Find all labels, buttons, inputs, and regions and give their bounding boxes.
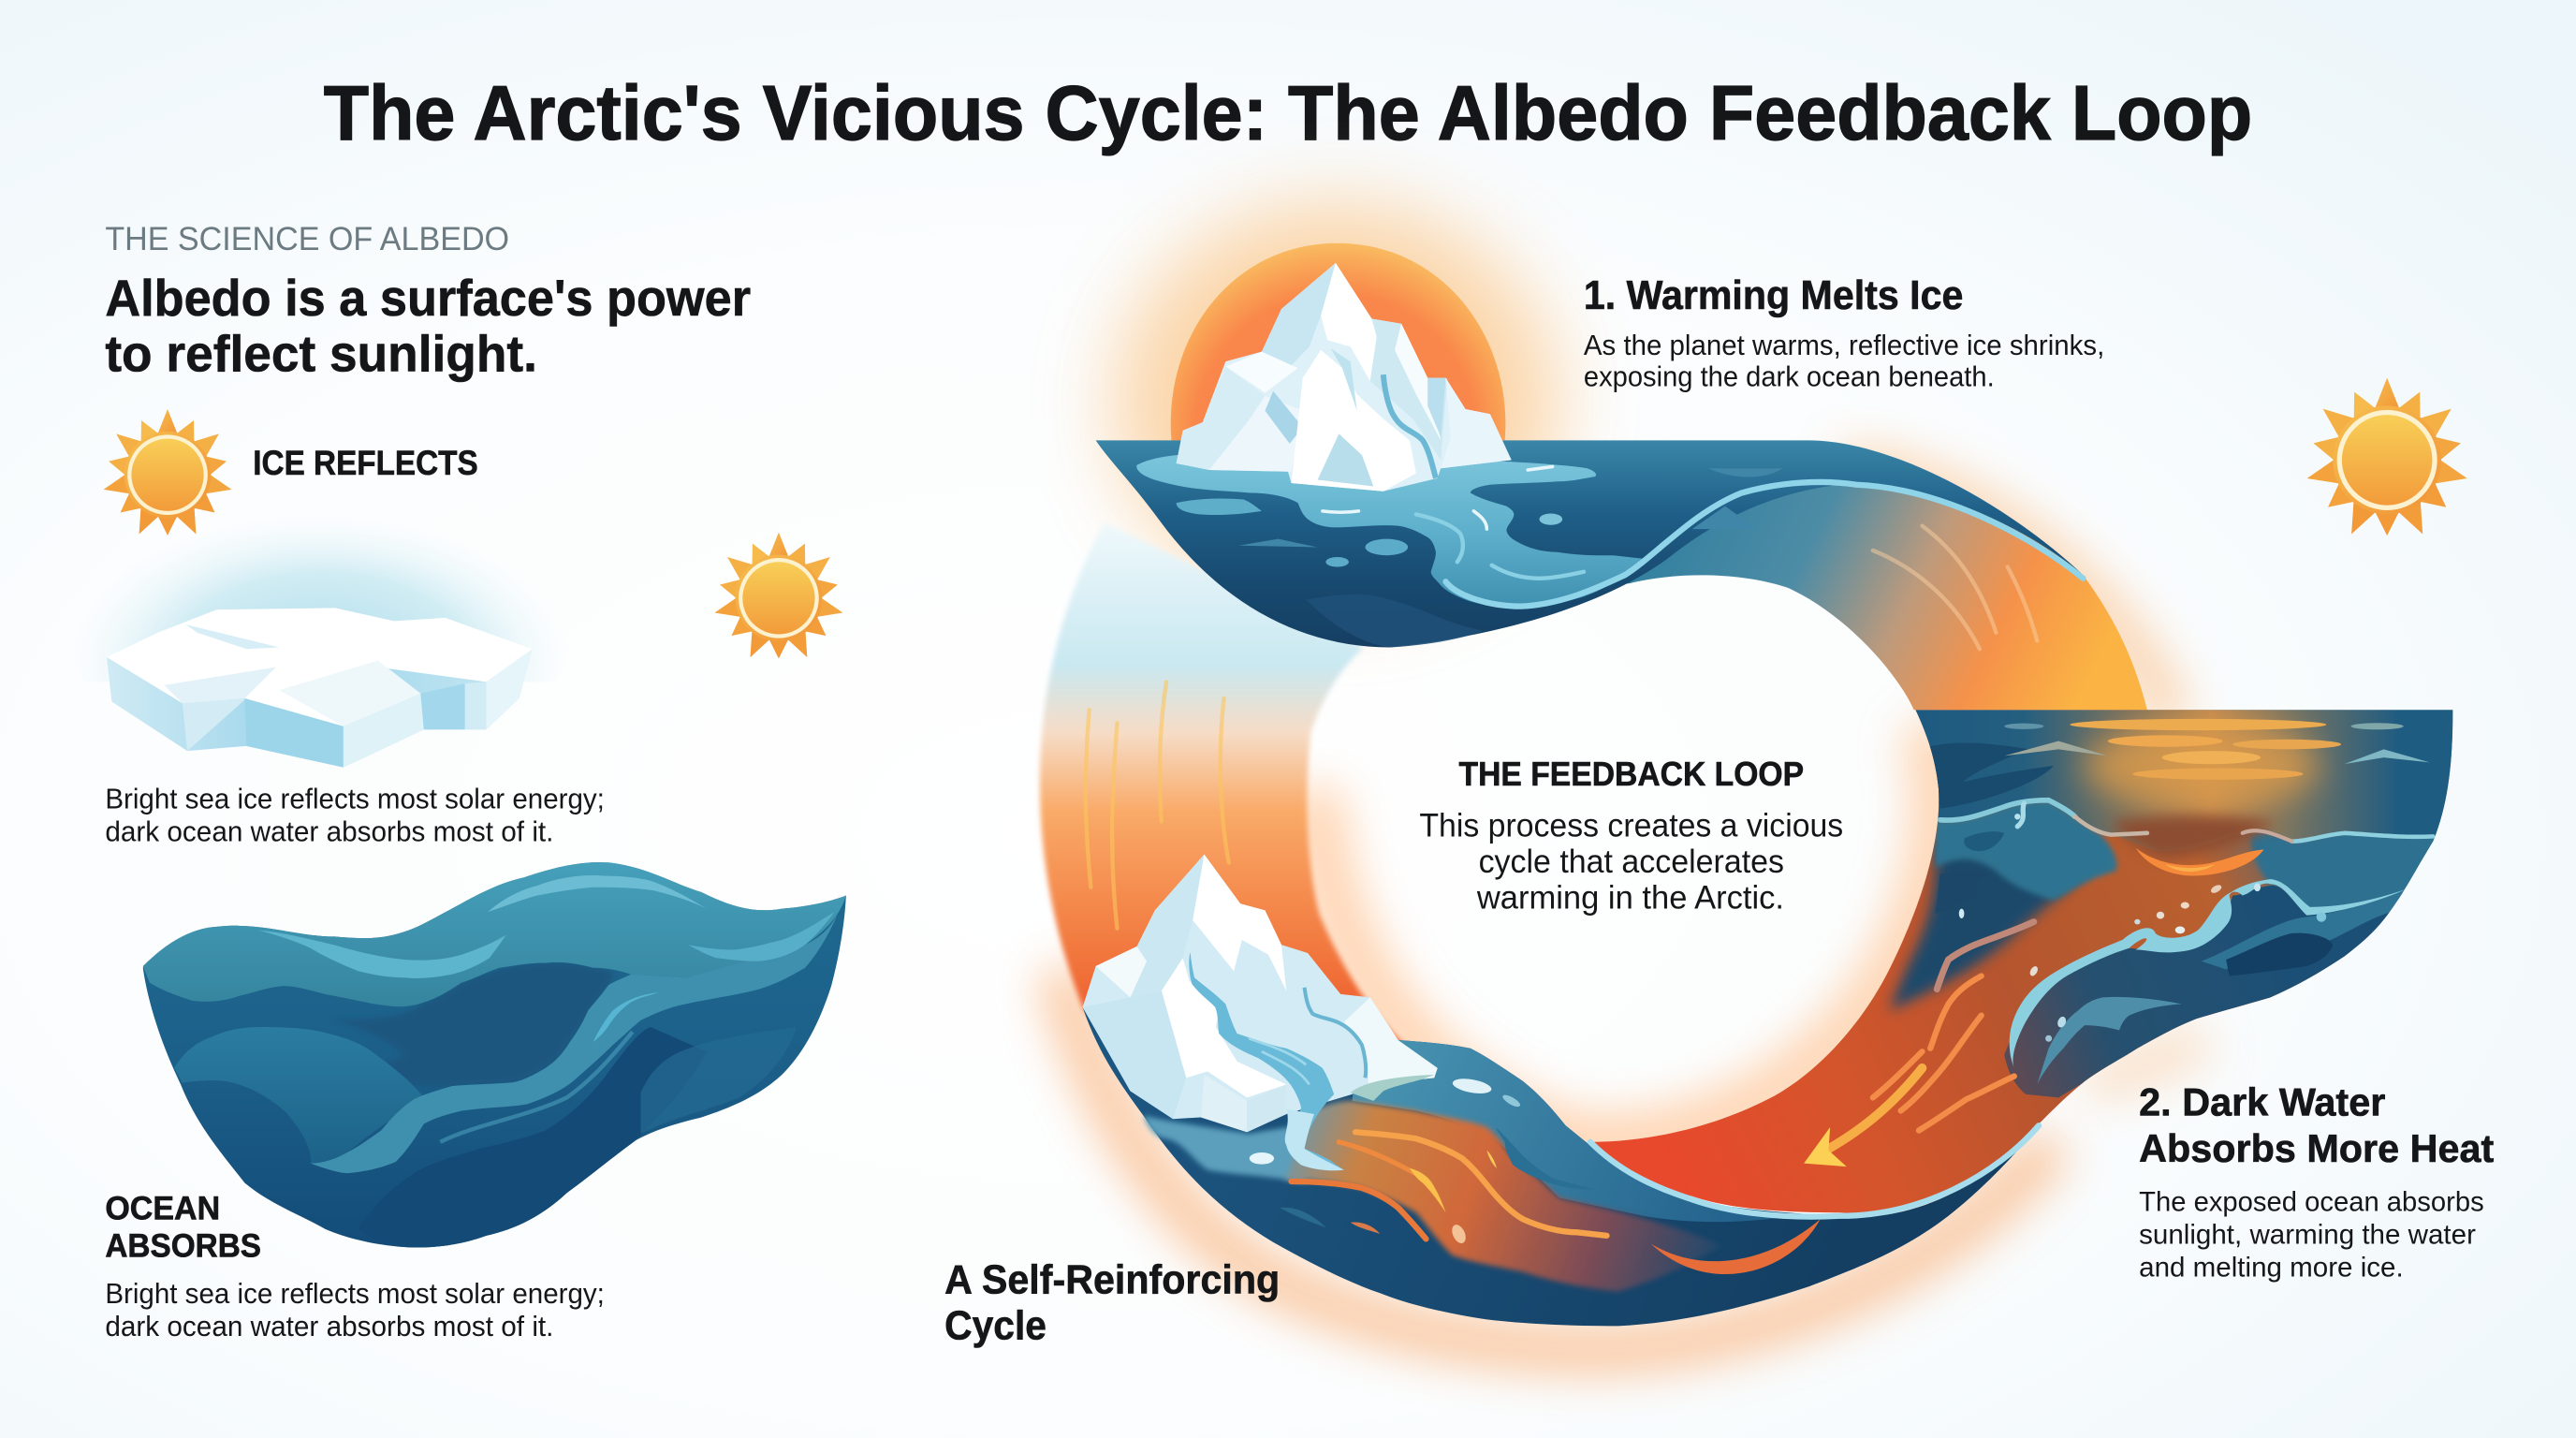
icon: right sun bbox=[2304, 378, 2470, 540]
ocean description bbox=[105, 1277, 605, 1343]
feedback loop centre text: warming in the Arctic. bbox=[1476, 880, 1784, 917]
icon: orange sun halo behind iceberg bbox=[1171, 243, 1505, 440]
step 2 text: Absorbs More Heat bbox=[2139, 1126, 2494, 1170]
section heading: to reflect sunlight. bbox=[105, 326, 537, 383]
icon: sun beside ice reflects bbox=[101, 409, 234, 538]
step 1 text: 1. Warming Melts Ice bbox=[1584, 272, 1963, 318]
icon: second sun bbox=[712, 533, 845, 662]
illustration: ocean wave bbox=[143, 862, 846, 1248]
ocean description: Bright sea ice reflects most solar energy; bbox=[105, 1277, 605, 1310]
dark left wedge bbox=[1889, 838, 2083, 1010]
panel: feedback loop ring bbox=[1040, 202, 2452, 1349]
ocean absorbs label bbox=[105, 1190, 261, 1265]
sky band with golden reflection bbox=[1906, 710, 2452, 851]
crests bbox=[1940, 800, 2075, 820]
self-reinforcing cycle caption bbox=[944, 1256, 1280, 1348]
segment 1: melting ice water bbox=[1096, 440, 2083, 648]
step 2 text: sunlight, warming the water bbox=[2139, 1220, 2476, 1251]
arrow: heat flow bbox=[1804, 1068, 1922, 1167]
segment 2: dark water absorbing heat bbox=[1590, 710, 2452, 1213]
step 2 text bbox=[2139, 1080, 2494, 1284]
self-reinforcing cycle caption: Cycle bbox=[944, 1302, 1046, 1348]
step 1 text bbox=[1584, 272, 2104, 392]
upper right arc of ring bbox=[1454, 484, 2147, 710]
section eyebrow: THE SCIENCE OF ALBEDO bbox=[105, 221, 509, 257]
feedback loop centre text bbox=[1419, 755, 1843, 917]
feedback loop centre text: THE FEEDBACK LOOP bbox=[1459, 755, 1804, 793]
ice description: Bright sea ice reflects most solar energy; bbox=[105, 783, 605, 815]
step 1 text: exposing the dark ocean beneath. bbox=[1584, 360, 1995, 392]
ocean absorbs label: ABSORBS bbox=[105, 1228, 261, 1265]
icon: iceberg melting below bbox=[1083, 855, 1438, 1170]
title: The Arctic's Vicious Cycle: The Albedo Feedback Loop bbox=[324, 70, 2252, 156]
ice description: dark ocean water absorbs most of it. bbox=[105, 815, 553, 848]
step 2 text: and melting more ice. bbox=[2139, 1253, 2404, 1284]
left arc of ring bbox=[1040, 522, 1412, 1084]
orange streaks bbox=[1873, 976, 2014, 1131]
lower dark water bbox=[2004, 886, 2415, 1097]
segment 3: lower ocean bbox=[1083, 1007, 2039, 1326]
icon: sea ice floe bbox=[104, 534, 537, 768]
ocean absorbs label: OCEAN bbox=[105, 1190, 220, 1226]
step 2 text: The exposed ocean absorbs bbox=[2139, 1187, 2484, 1218]
step 2 text: 2. Dark Water bbox=[2139, 1080, 2385, 1124]
step 1 text: As the planet warms, reflective ice shrinks, bbox=[1584, 329, 2104, 361]
section heading bbox=[105, 270, 751, 383]
feedback loop centre text: This process creates a vicious bbox=[1419, 807, 1843, 844]
section heading: Albedo is a surface's power bbox=[105, 270, 751, 327]
ice description bbox=[105, 783, 605, 848]
self-reinforcing cycle caption: A Self-Reinforcing bbox=[944, 1256, 1280, 1302]
icon: iceberg melting on top bbox=[1177, 263, 1512, 492]
feedback loop centre text: cycle that accelerates bbox=[1479, 844, 1784, 880]
teal mid left bbox=[1936, 800, 2116, 901]
ocean description: dark ocean water absorbs most of it. bbox=[105, 1310, 553, 1343]
soft glow around the ring bbox=[1060, 202, 2202, 1349]
ice reflects label: ICE REFLECTS bbox=[253, 444, 478, 482]
lower foam bbox=[2010, 879, 2407, 1068]
right mid teal bbox=[2250, 833, 2448, 916]
panel: the science of albedo bbox=[70, 221, 846, 1343]
